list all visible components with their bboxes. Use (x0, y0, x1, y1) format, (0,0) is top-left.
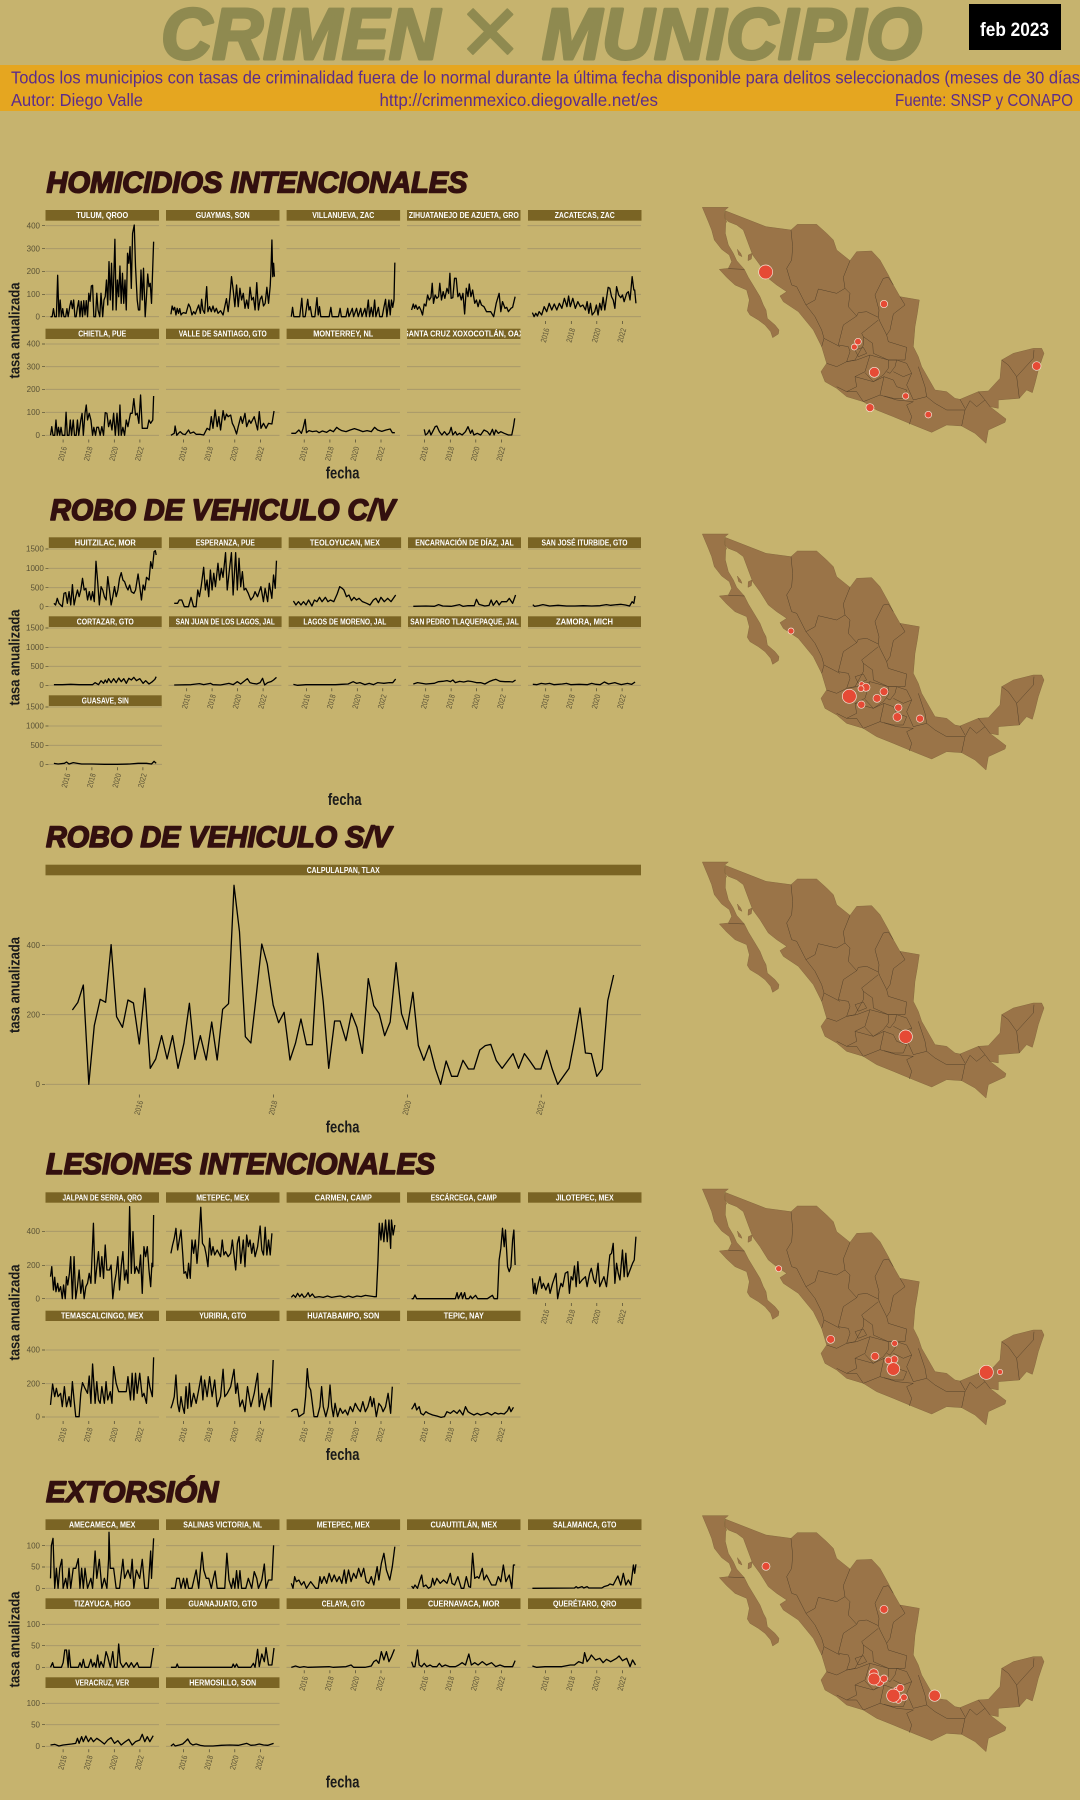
heading: extorsión: EXTORSIÓN (46, 1475, 220, 1509)
y axis rows: 50 (31, 1641, 41, 1650)
panel: Encarnación de Díaz: ENCARNACIÓN DE DÍAZ, JAL (415, 538, 514, 547)
panel: Zamora (528, 616, 641, 685)
x axis: row 2 Robo c/v: 2022 (495, 693, 508, 710)
x axis: row 2 Extorsión: 2022 (616, 1675, 628, 1692)
x axis: row 2 Robo c/v: 2018 (205, 693, 218, 710)
panel: Huatabampo: HUATABAMPO, SON (307, 1312, 380, 1321)
panel: San Pedro Tlaquepaque (408, 616, 521, 684)
x axis: row 2 Robo c/v: 2016 (300, 693, 312, 710)
x axis: Guasave: 2022 (136, 772, 149, 789)
x axis: row 2 Robo c/v: 2022 (256, 693, 269, 710)
y axis rows: 0 (39, 681, 44, 690)
panel: Metepec extorsión (287, 1519, 400, 1588)
y axis rows: 1000 (26, 564, 44, 573)
y axis row 1 (27, 221, 45, 321)
heading: homicidios: HOMICIDIOS INTENCIONALES (46, 166, 468, 200)
x axis: row 3 Extorsión: 2016 (56, 1754, 69, 1771)
panel: Tepic: TEPIC, NAY (444, 1312, 485, 1321)
panel: Chietla: CHIETLA, PUE (78, 330, 126, 339)
map base (702, 1189, 1044, 1425)
x axis: Zacatecas: 2020 (590, 327, 603, 344)
panel: Jilotepec: JILOTEPEC, MEX (556, 1193, 614, 1202)
panel: Jalpan de Serra: JALPAN DE SERRA, QRO (62, 1193, 142, 1202)
section: lesiones intencionales (8, 1148, 642, 1464)
panel: Cortazar (49, 616, 162, 685)
panel: Cuautitlán: CUAUTITLÁN, MEX (431, 1520, 498, 1530)
x axis: row 2 Lesiones: 2022 (495, 1426, 507, 1443)
x axis: row 2 Lesiones: 2022 (133, 1426, 146, 1443)
subtitle band (0, 65, 1080, 111)
x axis: row 2 Robo c/v: 2022 (615, 693, 628, 710)
x axis: row 2 Lesiones: 2020 (228, 1426, 241, 1443)
heading: robo s/v: ROBO DE VEHICULO S/V (46, 821, 394, 854)
panel: San Juan de los Lagos (169, 616, 282, 685)
panel: San José Iturbide: SAN JOSÉ ITURBIDE, GTO (542, 538, 628, 547)
panel: Cuernavaca (407, 1598, 520, 1667)
x axis: row 2 Lesiones: 2018 (82, 1426, 95, 1443)
panel: Guanajuato (166, 1598, 280, 1667)
x axis: 2018 (267, 1099, 280, 1116)
y axis rows: 1000 (26, 643, 44, 652)
panel: Jilotepec (528, 1192, 642, 1299)
panel: Zacatecas (528, 210, 642, 317)
x axis: row 2 Extorsión: 2018 (565, 1675, 577, 1692)
section: robo de vehiculo s/v (8, 821, 641, 1137)
y axis rows: 1500 (26, 624, 44, 633)
panel: Tulum: TULUM, QROO (76, 211, 128, 220)
panel: Santa Cruz Xoxocotlán: SANTA CRUZ XOXOCOTLÁN, OAX (404, 330, 525, 339)
y axis row 2 (27, 340, 45, 440)
panel: Tulum (46, 210, 159, 317)
x axis: row 2 Lesiones: 2020 (469, 1426, 482, 1443)
panel: Santa Cruz Xoxocotlán (404, 329, 525, 435)
panel: Salinas Victoria: SALINAS VICTORIA, NL (183, 1520, 262, 1530)
panel: Amecameca (46, 1519, 159, 1588)
y axis rows: 1000 (26, 722, 44, 731)
y axis rows: 50 (31, 1720, 41, 1729)
panel: Amecameca: AMECAMECA, MEX (69, 1520, 136, 1530)
x axis: row 3 Extorsión: 2022 (133, 1754, 146, 1771)
x axis: row 2 Extorsión: 2016 (539, 1675, 552, 1692)
x axis: row 2 Homicidios: 2018 (444, 445, 456, 462)
map: homicidios (702, 207, 1044, 443)
x axis: row 2 Extorsión: 2020 (590, 1675, 603, 1692)
x axis: Jilotepec: 2018 (565, 1308, 577, 1325)
x axis: row 2 Extorsión: 2020 (349, 1675, 361, 1692)
x axis: row 2 Robo c/v: 2018 (325, 693, 338, 710)
x axis: row 2 Lesiones: 2018 (203, 1426, 215, 1443)
x axis: row 2 Robo c/v: 2018 (444, 693, 457, 710)
panel: Guaymas (166, 210, 280, 315)
y axis rows: 0 (36, 1413, 41, 1422)
panel: Esperanza (169, 537, 282, 607)
x axis: Zacatecas: 2016 (539, 327, 552, 344)
heading: lesiones: LESIONES INTENCIONALES (46, 1148, 435, 1181)
panel: Valle de Santiago (166, 329, 280, 435)
x axis: row 2 Homicidios: 2018 (323, 445, 336, 462)
y axis row 2: 400 (27, 340, 41, 349)
y axis rows: 0 (36, 1294, 41, 1303)
y axis rows: 0 (36, 1742, 41, 1751)
x axis: row 2 Robo c/v: 2016 (180, 693, 193, 710)
panel: Yuriria: YURIRIA, GTO (199, 1312, 246, 1321)
panel: Monterrey: MONTERREY, NL (313, 330, 374, 339)
panel: Metepec lesiones: METEPEC, MEX (196, 1193, 250, 1202)
y axis row 2: 300 (27, 362, 41, 371)
panel: Teoloyucan: TEOLOYUCAN, MEX (310, 538, 381, 547)
y axis rows: 0 (36, 1663, 41, 1672)
x axis: row 2 Robo c/v: 2016 (539, 693, 552, 710)
map: robo con violencia (702, 534, 1044, 770)
x axis: Zacatecas: 2018 (565, 327, 577, 344)
x axis: Jilotepec (539, 1303, 628, 1325)
x axis: row 2 Robo c/v: 2020 (231, 693, 244, 710)
x axis label: fecha (328, 790, 362, 809)
x axis: row 2 Lesiones: 2018 (323, 1426, 336, 1443)
y axis rows: 200 (27, 1379, 41, 1388)
panel: Guasave (49, 695, 162, 764)
x axis: row 2 Robo c/v: 2020 (351, 693, 363, 710)
x axis: row 2 Extorsión: 2022 (495, 1675, 507, 1692)
subtitle band: Autor: Diego Valle (11, 90, 143, 110)
panel: Hermosillo: HERMOSILLO, SON (189, 1678, 257, 1688)
panel: Valle de Santiago: VALLE DE SANTIAGO, GTO (179, 330, 267, 339)
panel: Veracruz (46, 1677, 159, 1746)
y axis rows: 500 (30, 583, 44, 592)
panel: Guasave: GUASAVE, SIN (82, 696, 129, 705)
x axis: row 2 Lesiones: 2016 (418, 1426, 431, 1443)
panel: Guanajuato: GUANAJUATO, GTO (188, 1600, 257, 1608)
x axis: row 2 Homicidios: 2020 (228, 445, 241, 462)
y axis rows: 0 (39, 602, 44, 611)
y axis label: tasa anualizada (8, 609, 24, 706)
panel: Metepec lesiones (166, 1192, 280, 1278)
x axis: row 3 Extorsión (56, 1749, 266, 1771)
panel: Hermosillo (166, 1677, 280, 1746)
y axis rows: 0 (36, 1584, 41, 1593)
section: homicidios intencionales (8, 166, 642, 482)
panel: Carmen: CARMEN, CAMP (315, 1193, 372, 1202)
x axis label: fecha (326, 1445, 360, 1464)
x axis: row 3 Extorsión: 2020 (108, 1754, 120, 1771)
y axis rows: 1500 (26, 703, 44, 712)
x axis: row 2 Homicidios: 2016 (56, 445, 69, 462)
panel: Salinas Victoria (166, 1519, 280, 1588)
y axis row 1: 200 (27, 267, 41, 276)
y axis rows: 200 (27, 1261, 41, 1270)
title (161, 0, 922, 87)
section: robo de vehiculo c/v (8, 494, 641, 809)
panel: Temascalcingo (46, 1311, 159, 1417)
heading: robo c/v: ROBO DE VEHICULO C/V (50, 494, 398, 527)
x axis: Jilotepec: 2016 (539, 1308, 552, 1325)
map: lesiones (702, 1189, 1044, 1425)
x axis: row 2 Homicidios: 2016 (177, 445, 190, 462)
y axis rows: 100 (27, 1699, 41, 1708)
x axis: row 2 Lesiones: 2020 (349, 1426, 361, 1443)
panel: Lagos de Moreno: LAGOS DE MORENO, JAL (303, 617, 387, 626)
x axis: Jilotepec: 2020 (590, 1308, 603, 1325)
panel: Teoloyucan (289, 537, 401, 606)
y axis rows: 400 (27, 1346, 41, 1355)
panel: Esperanza: ESPERANZA, PUE (196, 538, 255, 547)
x axis: row 2 Extorsión: 2016 (418, 1675, 431, 1692)
panel: Villanueva: VILLANUEVA, ZAC (312, 211, 375, 220)
panel: Veracruz: VERACRUZ, VER (75, 1678, 130, 1688)
y axis rows: 50 (31, 1563, 41, 1572)
x axis: row 2 Homicidios (56, 440, 507, 462)
panel: Salamanca (528, 1519, 642, 1588)
x axis: 2016 (133, 1099, 145, 1116)
panel: Calpulalpan (46, 865, 641, 1084)
y axis rows (27, 1227, 45, 1422)
panel: Tizayuca (46, 1598, 159, 1667)
x axis: row 2 Lesiones: 2018 (444, 1426, 456, 1443)
x axis: row 2 Extorsión (298, 1670, 628, 1692)
panel: Chietla (46, 329, 159, 435)
panel: San José Iturbide (528, 537, 641, 606)
panel: Calpulalpan: CALPULALPAN, TLAX (307, 866, 380, 875)
x axis: row 2 Homicidios: 2018 (82, 445, 95, 462)
x axis: row 3 Extorsión: 2016 (177, 1754, 190, 1771)
x axis: Guasave: 2018 (85, 772, 98, 789)
x axis: row 2 Homicidios: 2020 (469, 445, 482, 462)
x axis: row 2 Lesiones: 2016 (56, 1426, 69, 1443)
panel: Huatabampo (287, 1311, 400, 1417)
x axis label: fecha (326, 1118, 360, 1137)
y axis rows: 100 (27, 1620, 41, 1629)
panel: Escárcega: ESCÁRCEGA, CAMP (431, 1193, 497, 1202)
x axis label: fecha (326, 463, 360, 482)
x axis: row 2 Lesiones: 2022 (374, 1426, 387, 1443)
panel: Querétaro (528, 1598, 642, 1667)
y axis: 0 (36, 1080, 41, 1089)
x axis: row 2 Homicidios: 2022 (374, 445, 387, 462)
x axis: 2022 (535, 1099, 547, 1116)
panel: Cuernavaca: CUERNAVACA, MOR (428, 1600, 500, 1608)
x axis: row 2 Homicidios: 2018 (203, 445, 215, 462)
y axis: 400 (27, 941, 41, 950)
y axis rows: 500 (30, 741, 44, 750)
y axis rows: 400 (27, 1227, 41, 1236)
y axis label: tasa anualizada (8, 1264, 24, 1360)
panel: Encarnación de Díaz (408, 537, 521, 606)
panel: Yuriria (166, 1311, 280, 1413)
y axis row 1: 0 (36, 312, 41, 321)
map points (788, 628, 924, 722)
x axis: row 2 Extorsión: 2018 (444, 1675, 456, 1692)
y axis rows: 100 (27, 1541, 41, 1550)
y axis row 1: 300 (27, 244, 41, 253)
x axis: row 2 Lesiones: 2016 (177, 1426, 190, 1443)
x axis: Guasave: 2016 (60, 772, 72, 789)
map: extorsión (702, 1516, 1044, 1752)
x axis: row 2 Robo c/v: 2020 (590, 693, 603, 710)
x axis: row 2 Homicidios: 2016 (298, 445, 310, 462)
panel: Carmen (287, 1192, 400, 1297)
panel: Querétaro: QUERÉTARO, QRO (553, 1600, 616, 1608)
map: robo sin violencia (702, 862, 1044, 1098)
x axis: row 2 Robo c/v: 2020 (470, 693, 483, 710)
panel: Monterrey (287, 329, 400, 433)
x axis: Guasave: 2020 (111, 772, 123, 789)
panel: Lagos de Moreno (289, 616, 401, 685)
y axis rows (26, 545, 48, 769)
y axis rows: 500 (30, 662, 44, 671)
panel: Villanueva (287, 210, 400, 317)
y axis label: tasa anualizada (8, 936, 24, 1033)
panel: San Juan de los Lagos: SAN JUAN DE LOS LAGOS, JAL (176, 617, 275, 626)
x axis: row 3 Extorsión: 2020 (228, 1754, 241, 1771)
panel: Temascalcingo: TEMASCALCINGO, MEX (61, 1312, 144, 1321)
x axis: row 2 Homicidios: 2022 (495, 445, 507, 462)
y axis rows (27, 1541, 45, 1751)
panel: Cuautitlán (407, 1519, 520, 1588)
x axis: row 2 Extorsión: 2022 (374, 1675, 387, 1692)
panel: Huitzilac (49, 537, 162, 607)
x axis: row 2 Homicidios: 2016 (418, 445, 431, 462)
x axis: row 2 Robo c/v: 2016 (419, 693, 432, 710)
x axis: row 2 Extorsión: 2018 (323, 1675, 336, 1692)
date badge: feb 2023 (980, 20, 1049, 41)
x axis: row 2 Homicidios: 2020 (349, 445, 361, 462)
map points (776, 1266, 1003, 1379)
panel: Tepic (407, 1311, 520, 1417)
x axis: Guasave (60, 767, 149, 789)
x axis: row 2 Homicidios: 2020 (108, 445, 120, 462)
panel: Tizayuca: TIZAYUCA, HGO (74, 1600, 131, 1608)
x axis: 2020 (401, 1099, 413, 1116)
map base (702, 862, 1044, 1098)
x axis: row 2 Lesiones: 2020 (108, 1426, 120, 1443)
x axis: row 2 Homicidios: 2022 (133, 445, 146, 462)
panel: Cortazar: CORTAZAR, GTO (77, 617, 134, 626)
subtitle band: http://crimenmexico.diegovalle.net/es (380, 90, 658, 110)
panel: Jalpan de Serra (46, 1192, 159, 1299)
x axis: row 2 Robo c/v: 2018 (564, 693, 577, 710)
panel: San Pedro Tlaquepaque: SAN PEDRO TLAQUEPAQUE, JAL (410, 617, 519, 626)
y axis label: tasa anualizada (8, 1591, 24, 1688)
y axis: 200 (27, 1010, 41, 1019)
x axis: row 2 Lesiones: 2016 (298, 1426, 310, 1443)
y axis row 1: 400 (27, 221, 41, 230)
x axis: row 2 Robo c/v: 2022 (376, 693, 389, 710)
map base (702, 1516, 1044, 1752)
map base (702, 534, 1044, 770)
x axis label: fecha (326, 1773, 360, 1792)
x axis: Zacatecas: 2022 (616, 327, 628, 344)
x axis: row 3 Extorsión: 2022 (254, 1754, 266, 1771)
date badge (969, 4, 1061, 50)
map points (762, 1562, 940, 1703)
y axis (27, 941, 45, 1089)
x axis: row 2 Homicidios: 2022 (254, 445, 266, 462)
y axis rows: 1500 (26, 545, 44, 554)
panel: Celaya: CELAYA, GTO (322, 1600, 365, 1608)
x axis (133, 1094, 547, 1116)
panel: Escárcega (407, 1192, 520, 1299)
panel: Zihuatanejo (407, 210, 520, 317)
y axis row 1: 100 (27, 290, 41, 299)
panel: Salamanca: SALAMANCA, GTO (553, 1520, 616, 1530)
y axis rows: 0 (39, 760, 44, 769)
x axis: row 2 Lesiones (56, 1421, 507, 1443)
panel: Guaymas: GUAYMAS, SON (196, 211, 250, 220)
x axis: Zacatecas (539, 321, 628, 344)
map point (899, 1030, 912, 1043)
panel: Zamora: ZAMORA, MICH (556, 617, 613, 626)
y axis row 2: 200 (27, 385, 41, 394)
y axis row 2: 0 (36, 431, 41, 440)
y axis label: tasa anualizada (8, 282, 24, 378)
x axis: row 3 Extorsión: 2018 (82, 1754, 95, 1771)
x axis: row 2 Extorsión: 2016 (298, 1675, 310, 1692)
y axis row 2: 100 (27, 408, 41, 417)
panel: Zihuatanejo: ZIHUATANEJO DE AZUETA, GRO (409, 211, 519, 220)
x axis: row 2 Lesiones: 2022 (254, 1426, 266, 1443)
section: extorsión (8, 1475, 642, 1792)
x axis: Jilotepec: 2022 (616, 1308, 628, 1325)
panel: Celaya (287, 1598, 400, 1667)
x axis: row 3 Extorsión: 2018 (203, 1754, 215, 1771)
x axis: row 2 Extorsión: 2020 (469, 1675, 482, 1692)
panel: Huitzilac: HUITZILAC, MOR (75, 538, 136, 547)
panel: Zacatecas: ZACATECAS, ZAC (555, 211, 615, 220)
panel: Metepec extorsión: METEPEC, MEX (317, 1520, 371, 1530)
x axis: row 2 Robo c/v (180, 688, 628, 710)
